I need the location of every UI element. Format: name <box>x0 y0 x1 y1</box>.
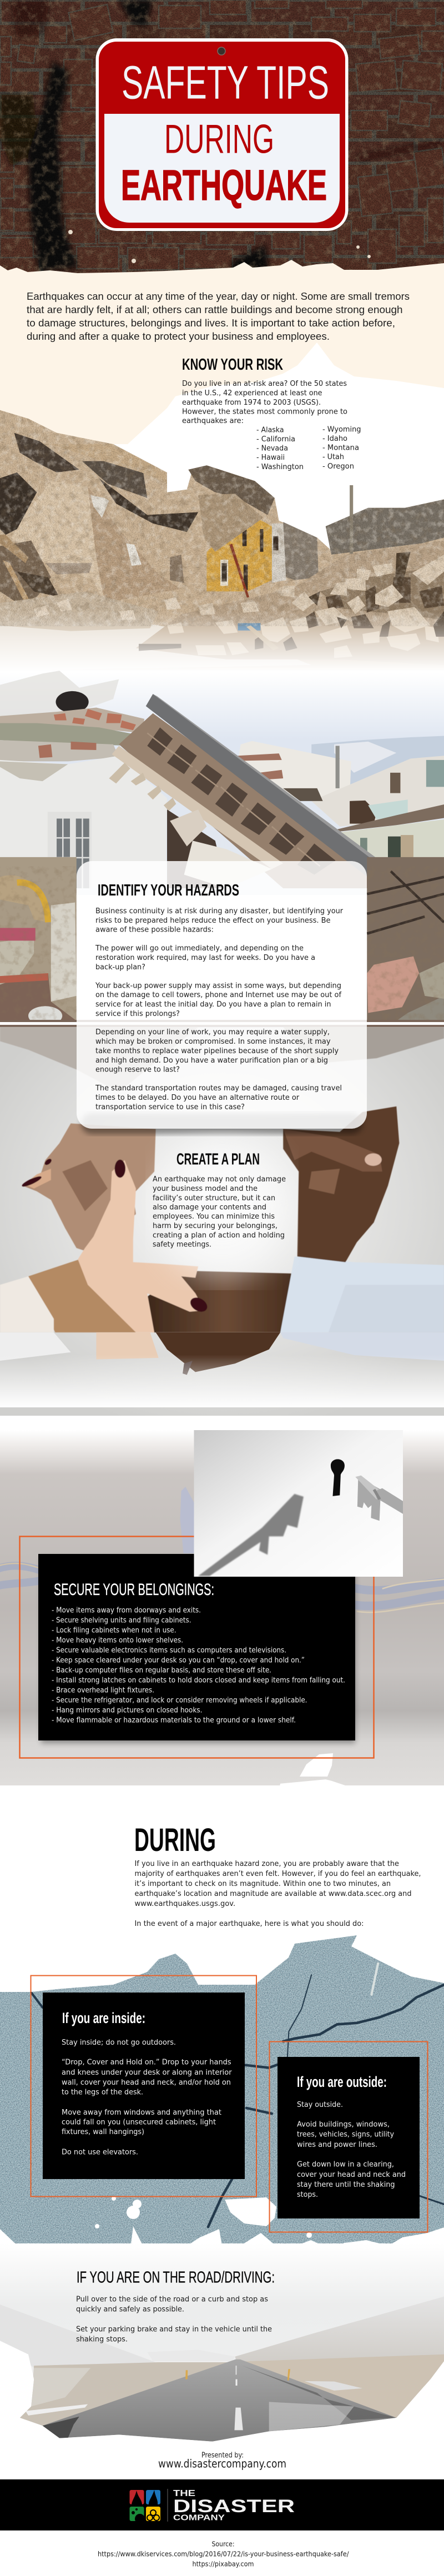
photo: key and keyhole <box>194 1430 405 1577</box>
text: communication hazard <box>95 982 342 1018</box>
text: power hazard <box>95 944 315 972</box>
heading: inside: If you are inside: <box>62 2010 145 2026</box>
list: at-risk states column 1: - Hawaii <box>256 453 285 462</box>
heading: on the road: IF YOU ARE ON THE ROAD/DRIVING: <box>77 2268 275 2286</box>
list: at-risk states column 2: - Idaho <box>322 434 347 443</box>
white torn area below the cream <box>128 343 444 444</box>
text: road steps: Pull over to the side of the road or a curb and stop as <box>76 2295 268 2304</box>
text: know your risk <box>182 379 347 425</box>
text: outside steps: Get down low in a clearing, <box>297 2160 394 2169</box>
list: at-risk states column 1: - Washington <box>256 462 304 471</box>
list of items: - Lock filing cabinets when not in use. <box>52 1626 176 1634</box>
heading: during: DURING <box>134 1822 216 1858</box>
text: transportation hazard: times to be delayed. Do you have an alternative route or <box>95 1093 299 1102</box>
list: at-risk states column 2: - Oregon <box>322 462 354 471</box>
title lines <box>121 57 329 209</box>
text: inside steps: wall, cover your head and neck, and/or hold on <box>62 2078 231 2087</box>
text: create a plan: An earthquake may not only damage <box>153 1175 286 1184</box>
list of items: - Move flammable or hazardous materials to the ground or a lower shelf. <box>52 1715 296 1724</box>
list: at-risk states column 2: - Utah <box>322 452 344 461</box>
logo wordmark: THE <box>173 2489 195 2498</box>
list: at-risk states column 1 <box>256 425 304 471</box>
text: transportation hazard: The standard transportation routes may be damaged, causing travel <box>95 1084 342 1093</box>
cream background with torn edge <box>0 230 444 444</box>
text: outside steps: stay there until the shaking <box>297 2180 395 2189</box>
presented by <box>158 2452 286 2471</box>
intro paragraph <box>27 290 410 342</box>
icon: water <box>146 2490 160 2504</box>
list of items: - Brace overhead light fixtures. <box>52 1686 154 1694</box>
text: know your risk: However, the states most commonly prone to <box>182 407 347 416</box>
icon: biohazard <box>146 2507 160 2521</box>
orange frame: outside <box>270 2042 427 2232</box>
soft white glow behind create a plan text <box>158 1144 286 1277</box>
text: inside steps: “Drop, Cover and Hold on.” Drop to your hands <box>62 2057 231 2066</box>
text: during introduction: majority of earthquakes aren’t even felt. However, if you do feel an earthquake, <box>134 1869 421 1878</box>
logo wordmark: COMPANY <box>173 2514 225 2523</box>
text: create a plan: also damage your contents and <box>153 1203 266 1211</box>
list of items: - Move heavy items onto lower shelves. <box>52 1636 183 1644</box>
list: at-risk states column 2: - Montana <box>322 443 359 452</box>
source credits: Source: <box>212 2540 234 2548</box>
panel: if you are inside <box>43 1993 245 2179</box>
text: during introduction: If you live in an earthquake hazard zone, you are probably aware that the <box>134 1859 399 1868</box>
text: outside steps: trees, vehicles, signs, utility <box>297 2130 394 2139</box>
icon: mold <box>130 2507 145 2524</box>
list of items: - Keep space cleared under your desk so you can “drop, cover and hold on.” <box>52 1656 305 1664</box>
text: communication hazard: service if this prolongs? <box>95 1009 180 1018</box>
list of items <box>52 1606 345 1724</box>
footer bar with logo <box>0 2479 444 2530</box>
text: create a plan: facility’s outer structure, but it can <box>153 1194 275 1203</box>
text: outside steps: Stay outside. <box>297 2100 343 2109</box>
text: water hazard: Depending on your line of work, you may require a water supply, <box>95 1028 330 1037</box>
intro paragraph: during and after a quake to protect your business and employees. <box>27 330 330 342</box>
text: create a plan: your business model and the <box>153 1184 258 1193</box>
lower left: cement mixer <box>0 857 77 1025</box>
icon: barbed wire <box>0 1487 444 1612</box>
text: water hazard: take months to replace water pipelines because of the short supply <box>95 1046 339 1055</box>
list: at-risk states column 1: - Nevada <box>256 444 288 453</box>
list: at-risk states column 1: - Alaska <box>256 425 284 434</box>
text: road steps <box>76 2295 272 2344</box>
text: inside steps <box>62 2038 232 2156</box>
orange frame: secure your belongings <box>20 1537 374 1758</box>
text: road steps: shaking stops. <box>76 2335 128 2344</box>
rock pile <box>136 540 444 665</box>
panel: if you are outside <box>278 2057 420 2218</box>
text: hazards intro: aware of these possible hazards: <box>95 925 214 934</box>
text: water hazard: enough reserve to last? <box>95 1065 180 1074</box>
heading: know your risk: KNOW YOUR RISK <box>182 356 283 374</box>
list of items: - Install strong latches on cabinets to hold doors closed and keep items from falling out. <box>52 1676 345 1684</box>
text: create a plan: employees. You can minimize this <box>153 1212 275 1221</box>
text: water hazard: which may be broken or compromised. In some instances, it may <box>95 1037 331 1046</box>
text: road steps: Set your parking brake and stay in the vehicle until the <box>76 2325 272 2334</box>
text: during introduction <box>134 1859 421 1928</box>
text: inside steps: fixtures, wall hangings) <box>62 2127 144 2136</box>
text: water hazard: and high demand. Do you have a water purification plan or a big <box>95 1056 328 1065</box>
text: inside steps: to the legs of the desk. <box>62 2087 143 2096</box>
text: communication hazard: service for at least the initial day. Do you have a plan to remain in <box>95 1000 331 1009</box>
photo: joined hands <box>0 1027 444 1416</box>
heading: outside: If you are outside: <box>297 2074 387 2090</box>
list of items: - Move items away from doorways and exits. <box>52 1606 201 1614</box>
source credits: https://www.dkiservices.com/blog/2016/07/22/is-your-business-earthquake-safe/ <box>98 2550 349 2558</box>
text: inside steps: Stay inside; do not go outdoors. <box>62 2038 176 2047</box>
sign: safety tips during earthquake title <box>95 38 349 231</box>
intro paragraph: Earthquakes can occur at any time of the year, day or night. Some are small tremors <box>27 290 410 302</box>
list: at-risk states column 2: - Wyoming <box>322 425 361 434</box>
presented by: Presented by: <box>201 2452 244 2459</box>
text: create a plan: creating a plan of action and holding <box>153 1231 285 1240</box>
text: know your risk: earthquakes are: <box>182 416 244 425</box>
text: inside steps: and knees under your desk or along an interior <box>62 2068 232 2077</box>
photo: cracked concrete <box>0 1932 444 2254</box>
photo: collapsed roof and damaged houses <box>0 671 444 1025</box>
text: during introduction: In the event of a major earthquake, here is what you should do: <box>134 1919 364 1928</box>
logo wordmark <box>173 2489 295 2523</box>
photo: collapsed buildings rubble <box>0 410 444 677</box>
text: transportation hazard: transportation service to use in this case? <box>95 1103 245 1111</box>
text: communication hazard: Your back-up power supply may assist in some ways, but depending <box>95 982 341 990</box>
heading: identify your hazards: IDENTIFY YOUR HAZARDS <box>98 882 239 899</box>
divider stripes <box>0 1020 444 1027</box>
text: create a plan <box>153 1175 286 1249</box>
text: know your risk: earthquake from 1974 to 2003 (USGS). <box>182 398 321 407</box>
lower right: wood and brick debris <box>367 857 444 1021</box>
text: outside steps: stops. <box>297 2190 318 2199</box>
text: know your risk: Do you live in an at-risk area? Of the 50 states <box>182 379 347 388</box>
text: know your risk: in the U.S., 42 experienced at least one <box>182 389 322 398</box>
list: at-risk states column 2 <box>322 425 361 471</box>
text: power hazard: back-up plan? <box>95 963 145 972</box>
icon: fire <box>130 2490 144 2504</box>
brick wall header background <box>0 0 444 275</box>
text: outside steps <box>297 2100 406 2199</box>
photo: misty road <box>0 2243 444 2447</box>
orange frame: inside <box>31 1975 256 2196</box>
text: communication hazard: on the damage to cell towers, phone and Internet use may be out of <box>95 990 342 999</box>
text: outside steps: cover your head and neck and <box>297 2170 406 2179</box>
text: transportation hazard <box>95 1084 342 1111</box>
text: hazards intro: Business continuity is at risk during any disaster, but identifying your <box>95 907 343 915</box>
intro paragraph: that are hardly felt, if at all; others can rattle buildings and become strong enough <box>27 304 403 315</box>
heading: secure your belongings: SECURE YOUR BELONGINGS: <box>54 1581 214 1599</box>
source credits: https://pixabay.com <box>192 2560 254 2568</box>
panel: identify your hazards <box>77 861 367 1134</box>
text: water hazard <box>95 1028 339 1074</box>
list of items: - Back-up computer files on regular basis, and store these off site. <box>52 1666 271 1674</box>
icon: sign hole <box>218 47 225 55</box>
white torn edge under the grey section <box>0 1779 444 1975</box>
logo wordmark: DISASTER <box>173 2496 295 2516</box>
text: during introduction: earthquake’s location and magnitude are available at www.data.scec.org and <box>134 1889 412 1898</box>
grey section with barbed wire <box>0 1430 444 1785</box>
intro paragraph: to damage structures, belongings and lives. It is important to take action before, <box>27 317 395 329</box>
title lines: SAFETY TIPS <box>122 57 329 109</box>
text: hazards intro <box>95 907 343 934</box>
heading: create a plan: CREATE A PLAN <box>176 1150 260 1168</box>
text: during introduction: it’s important to check on its magnitude. Within one to two minutes, an <box>134 1879 391 1888</box>
list of items: - Secure the refrigerator, and lock or consider removing wheels if applicable. <box>52 1695 307 1704</box>
text: create a plan: safety meetings. <box>153 1240 211 1249</box>
text: power hazard: The power will go out immediately, and depending on the <box>95 944 304 953</box>
text: inside steps: could fall on you (unsecured cabinets, light <box>62 2117 216 2126</box>
presented by: www.disastercompany.com <box>158 2457 286 2471</box>
text: create a plan: harm by securing your belongings, <box>153 1221 278 1230</box>
title lines: EARTHQUAKE <box>121 162 327 209</box>
text: inside steps: Do not use elevators. <box>62 2147 138 2156</box>
text: inside steps: Move away from windows and anything that <box>62 2108 221 2117</box>
list: at-risk states column 1: - California <box>256 435 295 444</box>
text: road steps: quickly and safely as possible. <box>76 2305 184 2314</box>
list of items: - Secure shelving units and filing cabinets. <box>52 1616 191 1624</box>
source credits <box>98 2540 349 2568</box>
list of items: - Hang mirrors and pictures on closed hooks. <box>52 1705 202 1714</box>
title lines: DURING <box>164 117 274 162</box>
list of items: - Secure valuable electronics items such as computers and televisions. <box>52 1646 286 1654</box>
text: hazards intro: risks to be prepared helps reduce the effect on your business. Be <box>95 916 331 925</box>
text: during introduction: www.earthquakes.usgs.gov. <box>134 1899 235 1908</box>
text: outside steps: Avoid buildings, windows, <box>297 2120 390 2129</box>
text: outside steps: wires and power lines. <box>297 2140 377 2149</box>
text: power hazard: restoration work required, may last for weeks. Do you have a <box>95 953 315 962</box>
panel: secure your belongings <box>38 1554 355 1743</box>
